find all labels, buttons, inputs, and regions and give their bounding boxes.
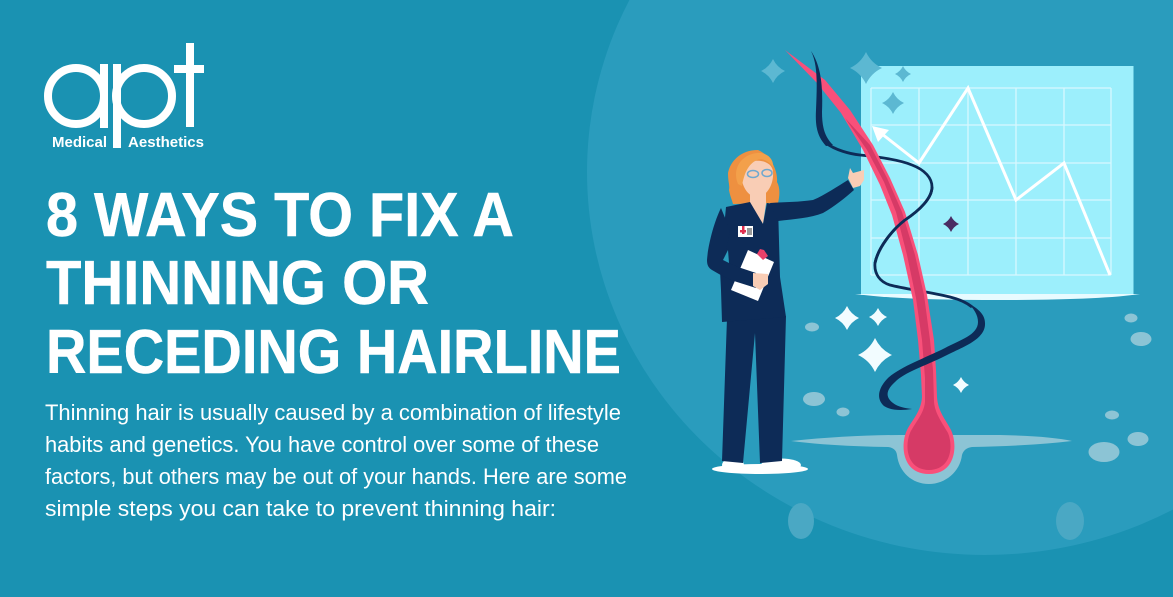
gap between arm and torso <box>723 250 729 263</box>
intro paragraph: Thinning hair is usually caused by a combination of lifestyle <box>45 400 621 425</box>
intro paragraph <box>45 400 627 521</box>
chart board <box>855 66 1140 300</box>
title: 8 WAYS TO FIX A <box>46 181 514 250</box>
title <box>46 181 621 387</box>
skin follicle <box>791 435 1072 484</box>
jacket <box>720 202 786 322</box>
front hair <box>736 153 773 186</box>
clipboard <box>731 249 774 301</box>
trousers <box>722 316 786 463</box>
faded bubbles <box>788 502 1084 540</box>
glasses <box>748 170 772 178</box>
character: doctor <box>707 150 864 474</box>
dark sparkle <box>943 216 959 232</box>
hair strand top thick section <box>811 51 833 146</box>
shoes <box>712 458 808 474</box>
pointing arm <box>770 180 854 221</box>
neck and face <box>741 161 773 224</box>
title: RECEDING HAIRLINE <box>46 318 621 387</box>
intro paragraph: simple steps you can take to prevent thinning hair: <box>45 496 556 521</box>
dark hair strand behind shaft <box>826 143 972 307</box>
title: THINNING OR <box>46 249 429 318</box>
back hair <box>728 150 779 204</box>
background circle <box>587 0 1173 555</box>
pink hair shaft and bulb <box>785 50 954 474</box>
badge <box>738 226 753 237</box>
holding arm <box>707 208 756 288</box>
floating bubbles <box>803 314 1152 462</box>
line chart arrow <box>872 88 1110 275</box>
holding hand <box>753 273 768 290</box>
hair strand crossing over shaft <box>875 187 932 263</box>
teal sparkles <box>761 52 911 114</box>
logo: apt Medical Aesthetics: Medical <box>52 135 107 151</box>
intro paragraph: habits and genetics. You have control over some of these <box>45 432 599 457</box>
hand <box>848 168 864 188</box>
hair strand lower thick section <box>879 303 985 410</box>
white sparkles <box>835 306 969 393</box>
logo: apt Medical Aesthetics <box>48 43 204 151</box>
logo: apt Medical Aesthetics: Aesthetics <box>128 135 204 151</box>
intro paragraph: factors, but others may be out of your hands. Here are some <box>45 464 627 489</box>
